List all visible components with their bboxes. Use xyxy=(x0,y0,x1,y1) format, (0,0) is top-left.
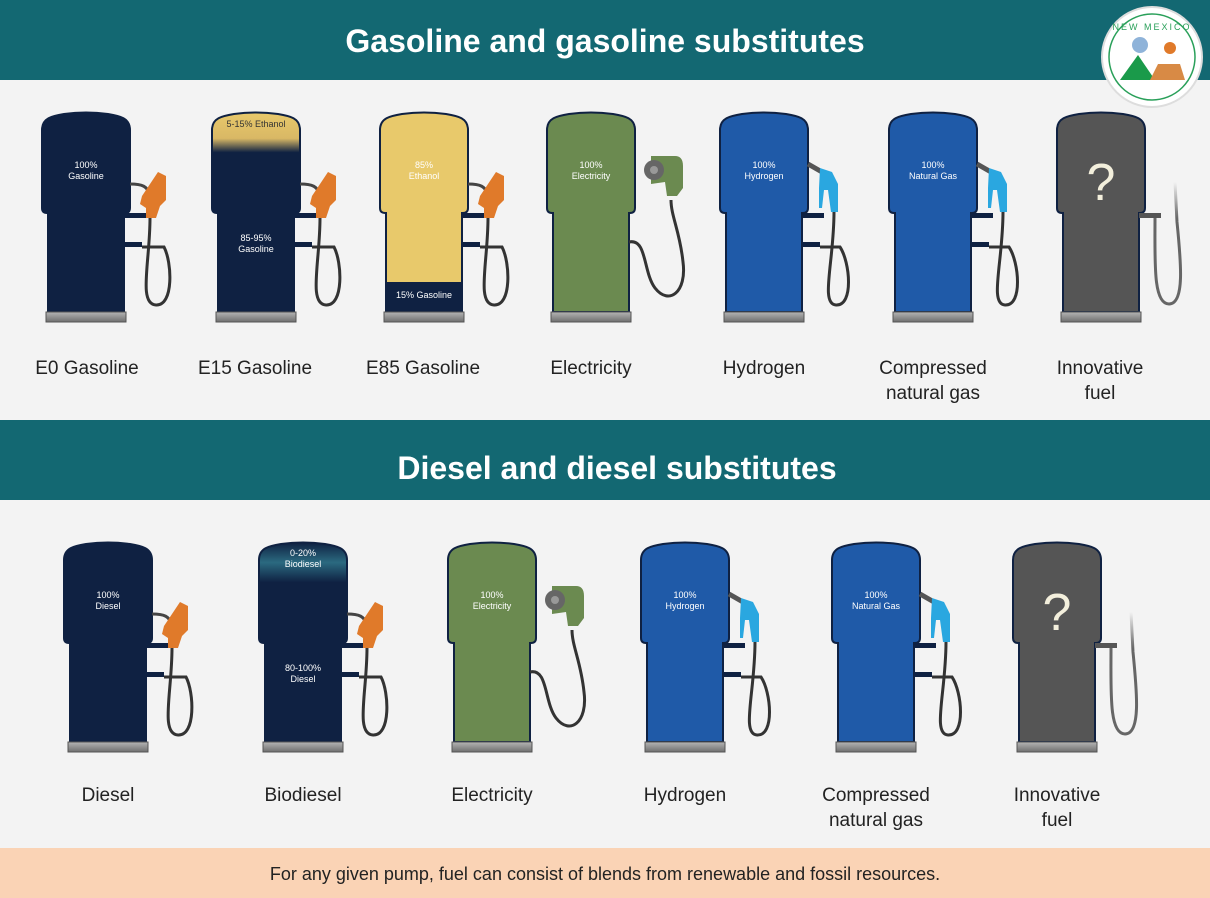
pump: CNG: 100% xyxy=(921,160,945,170)
pump: electricity: Electricity xyxy=(473,601,512,611)
labels: gasoline row: E85 Gasoline xyxy=(366,358,480,379)
labels: diesel row: Electricity xyxy=(451,785,533,806)
pump: CNG xyxy=(832,542,960,752)
pump: innovative: ? xyxy=(1043,584,1071,642)
pump: CNG: Natural Gas xyxy=(852,601,901,611)
pump: hydrogen xyxy=(720,112,848,322)
labels: diesel row: natural gas xyxy=(829,810,923,831)
pump: E0: Gasoline xyxy=(68,171,104,181)
pump: electricity: 100% xyxy=(480,590,504,600)
logo: New Mexico Environment Department: NEW MEXICO xyxy=(1112,22,1192,32)
labels: gasoline row: Electricity xyxy=(550,358,632,379)
labels: diesel row: Diesel xyxy=(82,785,134,806)
labels: gasoline row: Compressed xyxy=(879,358,987,379)
labels: diesel row: fuel xyxy=(1042,810,1072,831)
pump: electricity: 100% xyxy=(579,160,603,170)
pump: E0 xyxy=(42,112,170,322)
pump: E85 xyxy=(380,112,508,322)
labels: gasoline row: natural gas xyxy=(886,383,980,404)
pump: E85: Ethanol xyxy=(409,171,439,181)
header: gasoline xyxy=(0,0,1210,80)
pump: electricity xyxy=(448,542,585,752)
labels: gasoline row xyxy=(35,358,1143,404)
pump: E85: 85% xyxy=(415,160,433,170)
labels: diesel row: Hydrogen xyxy=(644,785,726,806)
pump: diesel: 100% xyxy=(96,590,120,600)
pump: electricity xyxy=(547,112,684,322)
pump: hydrogen: 100% xyxy=(673,590,697,600)
labels: gasoline row: Hydrogen xyxy=(723,358,805,379)
pump: innovative xyxy=(1013,542,1137,752)
labels: diesel row: Biodiesel xyxy=(264,785,342,806)
pump: biodiesel: 80-100% xyxy=(285,663,321,673)
header: gasoline: Gasoline and gasoline substitutes xyxy=(345,23,865,59)
header: diesel xyxy=(0,420,1210,500)
pump: diesel xyxy=(64,542,192,752)
header: diesel: Diesel and diesel substitutes xyxy=(397,450,837,486)
pump: CNG: Natural Gas xyxy=(909,171,958,181)
labels: gasoline row: E0 Gasoline xyxy=(35,358,139,379)
labels: gasoline row: fuel xyxy=(1085,383,1115,404)
footer note: For any given pump, fuel can consist of blends from renewable and fossil resources. xyxy=(270,864,940,884)
pump: E0: 100% xyxy=(74,160,98,170)
pump: hydrogen xyxy=(641,542,770,752)
pump: hydrogen: 100% xyxy=(752,160,776,170)
pump: electricity: Electricity xyxy=(572,171,611,181)
pump: hydrogen: Hydrogen xyxy=(665,601,705,611)
pump: E15: 85-95% xyxy=(240,233,272,243)
pump: CNG xyxy=(889,112,1018,322)
pump: hydrogen: Hydrogen xyxy=(744,171,784,181)
footer note xyxy=(0,848,1210,898)
panel: diesel pumps xyxy=(64,542,1137,752)
logo: New Mexico Environment Department xyxy=(1102,7,1202,107)
pump: CNG: 100% xyxy=(864,590,888,600)
labels: diesel row: Compressed xyxy=(822,785,930,806)
labels: gasoline row: E15 Gasoline xyxy=(198,358,312,379)
pump: E85: 15% Gasoline xyxy=(396,290,452,300)
panel: gasoline pumps xyxy=(42,112,1181,322)
labels: diesel row: Innovative xyxy=(1014,785,1100,806)
pump: E15: 5-15% Ethanol xyxy=(226,119,286,129)
pump: E15 xyxy=(212,112,340,322)
pump: innovative xyxy=(1057,112,1181,322)
pump: biodiesel xyxy=(259,542,387,752)
labels: gasoline row: Innovative xyxy=(1057,358,1143,379)
pump: innovative: ? xyxy=(1087,154,1115,212)
pump: biodiesel: 0-20% xyxy=(290,548,316,558)
pump: biodiesel: Biodiesel xyxy=(285,559,321,569)
pump: E15: Gasoline xyxy=(238,244,274,254)
pump: diesel: Diesel xyxy=(95,601,121,611)
labels: diesel row xyxy=(82,785,1100,831)
pump: biodiesel: Diesel xyxy=(290,674,316,684)
